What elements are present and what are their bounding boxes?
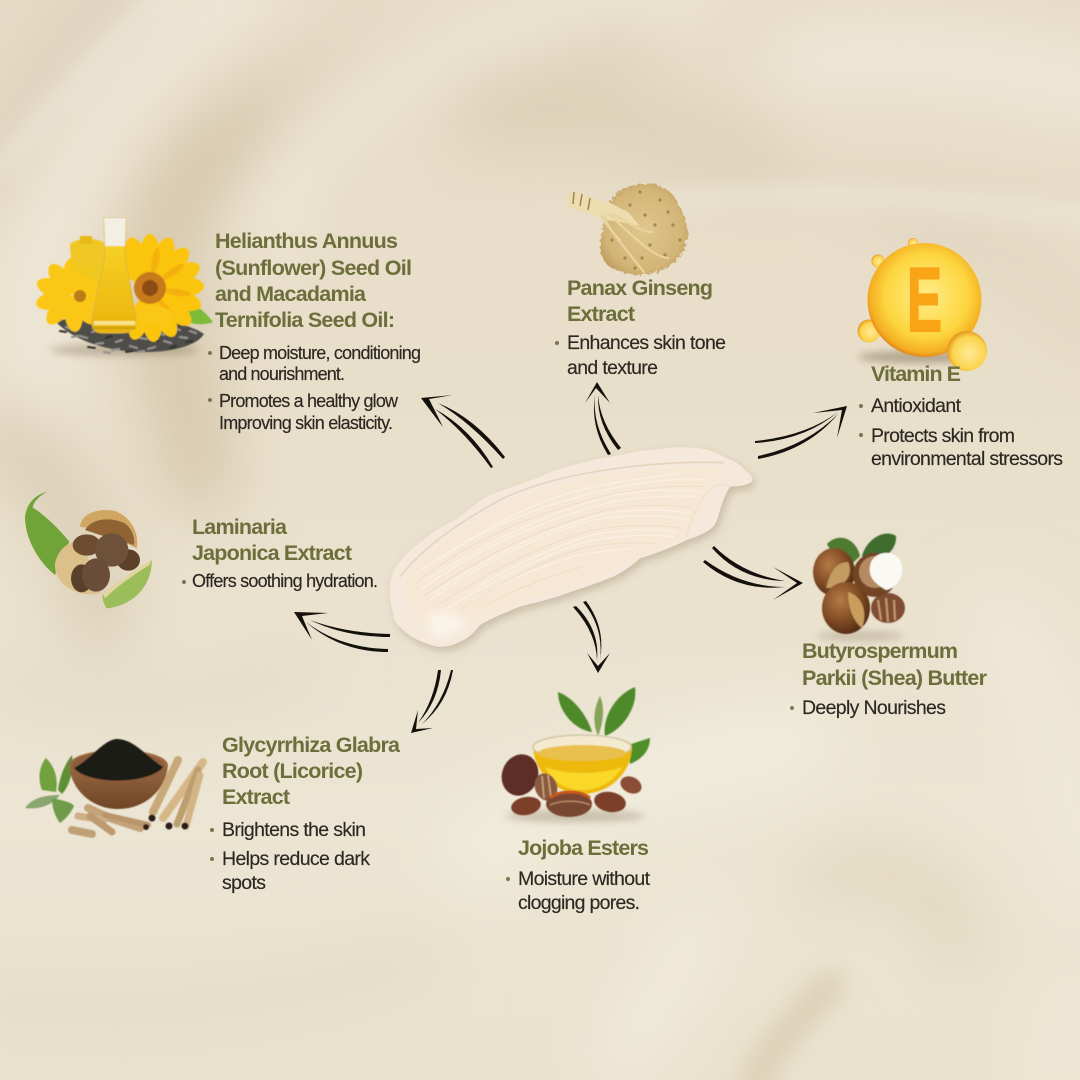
heading: panax ginseng [567, 276, 713, 326]
text: laminaria benefits: Offers soothing hydration. [192, 571, 378, 591]
icon: licorice bowl and roots [25, 739, 203, 834]
text: shea benefits: Deeply Nourishes [802, 697, 946, 719]
heading: licorice [222, 733, 401, 809]
heading: laminaria japonica: Laminaria [192, 515, 288, 539]
text: licorice benefits [210, 819, 370, 894]
panel: panax ginseng [555, 184, 726, 379]
text: licorice benefits: Helps reduce dark [222, 848, 370, 870]
heading: laminaria japonica [192, 515, 352, 565]
text: vitamin E benefits: Protects skin from [871, 425, 1015, 447]
text: vitamin E benefits: environmental stressors [871, 448, 1063, 470]
panel: vitamin E [858, 238, 1063, 470]
heading: jojoba esters: Jojoba Esters [518, 836, 649, 860]
arrow: to licorice [411, 670, 453, 733]
heading: shea butter: Butyrospermum [802, 639, 958, 663]
icon: jojoba oil bowl and seeds [496, 687, 650, 822]
icon: vitamin E capsule [858, 238, 987, 371]
cream swatch [390, 447, 752, 647]
text: jojoba benefits [506, 868, 651, 914]
heading: shea butter: Parkii (Shea) Butter [802, 666, 988, 690]
heading: sunflower oil: Ternifolia Seed Oil: [215, 308, 395, 332]
E letter: E [907, 250, 942, 351]
heading: licorice: Root (Licorice) [222, 759, 363, 783]
text: sunflower oil benefits [208, 343, 421, 433]
text: ginseng benefits: Enhances skin tone [567, 332, 726, 354]
text: licorice benefits: spots [222, 872, 266, 894]
heading: sunflower oil: (Sunflower) Seed Oil [215, 256, 412, 280]
text: jojoba benefits: Moisture without [518, 868, 651, 890]
icon: laminaria pod and leaf [25, 492, 152, 608]
text: ginseng benefits: and texture [567, 357, 658, 379]
heading: licorice: Extract [222, 785, 290, 809]
heading: panax ginseng: Extract [567, 302, 635, 326]
arrow: to jojoba [573, 601, 610, 673]
arrow: to sunflower oil [421, 395, 505, 468]
text: sunflower oil benefits: and nourishment. [219, 364, 345, 384]
text: sunflower oil benefits: Promotes a healthy glow [219, 391, 399, 411]
arrow: to laminaria [294, 612, 390, 652]
heading: laminaria japonica: Japonica Extract [192, 541, 352, 565]
icon: sunflower and oil bottle [34, 218, 213, 356]
panel: laminaria japonica [25, 492, 378, 608]
text: sunflower oil benefits: Deep moisture, conditioning [219, 343, 421, 363]
heading: licorice: Glycyrrhiza Glabra [222, 733, 401, 757]
panel: licorice [25, 733, 401, 894]
arrow: to vitamin E [755, 406, 847, 459]
text: sunflower oil benefits: Improving skin elasticity. [219, 413, 393, 433]
icon: shea nuts and butter [813, 533, 905, 641]
heading: sunflower oil: and Macadamia [215, 282, 367, 306]
heading: sunflower oil [215, 229, 412, 332]
heading: vitamin E: Vitamin E [871, 362, 961, 386]
heading: sunflower oil: Helianthus Annuus [215, 229, 398, 253]
panel: jojoba esters [496, 687, 651, 914]
panel: sunflower oil [34, 218, 421, 433]
icon: ginseng root and powder [566, 184, 687, 275]
arrow: to ginseng [585, 382, 621, 455]
heading: shea butter [802, 639, 988, 690]
text: vitamin E benefits [859, 395, 1063, 470]
text: jojoba benefits: clogging pores. [518, 892, 640, 914]
panel: shea butter [790, 533, 988, 719]
text: licorice benefits: Brightens the skin [222, 819, 366, 841]
text: vitamin E benefits: Antioxidant [871, 395, 962, 417]
heading: panax ginseng: Panax Ginseng [567, 276, 713, 300]
arrow: to shea butter [703, 546, 803, 600]
text: ginseng benefits [555, 332, 726, 379]
